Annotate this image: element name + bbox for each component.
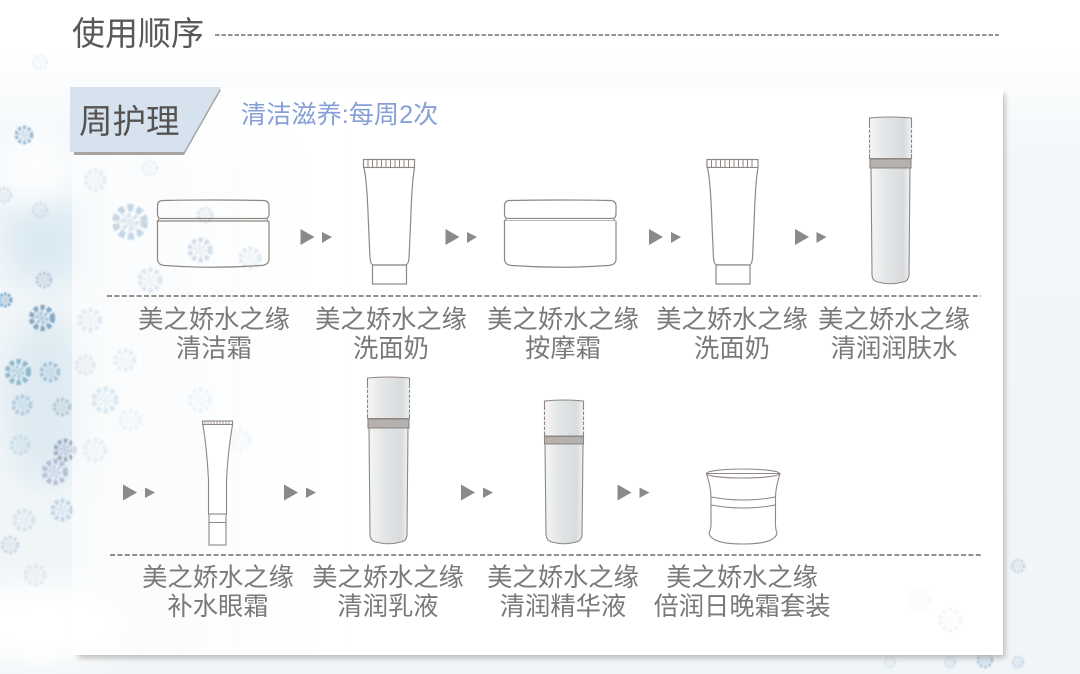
title: 使用顺序 xyxy=(72,15,204,52)
label: step 9: 美之娇水之缘 xyxy=(666,564,818,592)
panel shadow xyxy=(78,94,1005,658)
arrows xyxy=(123,229,826,500)
arrow 6 xyxy=(284,484,316,500)
label: step 8: 清润精华液 xyxy=(500,593,626,621)
label: step 5: 清润润肤水 xyxy=(831,335,957,363)
label: step 5: 美之娇水之缘 xyxy=(818,306,970,334)
icon: lotion bottle xyxy=(368,377,410,544)
panel crystals xyxy=(76,161,961,631)
label: step 9: 倍润日晚霜套装 xyxy=(653,593,831,621)
tag: weekly care xyxy=(70,87,221,155)
label: step 2: 洗面奶 xyxy=(353,335,429,363)
label: step 2 xyxy=(315,306,467,363)
label: step 7 xyxy=(312,564,464,621)
arrow 7 xyxy=(461,484,493,500)
label: step 1 xyxy=(138,306,290,363)
icon: essence bottle xyxy=(544,400,584,544)
icon: toner bottle xyxy=(870,117,912,284)
label: step 4 xyxy=(656,306,808,363)
arrow 2 xyxy=(446,229,477,245)
arrow 5 xyxy=(123,484,155,500)
icon: tube 1 xyxy=(364,160,414,284)
icon: tube 2 xyxy=(707,160,758,284)
label: step 5 xyxy=(818,306,970,363)
arrow 3 xyxy=(649,229,681,245)
icon: eye cream tube xyxy=(202,421,232,545)
arrow 4 xyxy=(795,229,826,245)
tag heading: 周护理 xyxy=(79,104,180,141)
label: step 6 xyxy=(142,564,294,621)
label: step 2: 美之娇水之缘 xyxy=(315,306,467,334)
label: step 3 xyxy=(487,306,639,363)
arrow 8 xyxy=(618,484,650,500)
label: step 8: 美之娇水之缘 xyxy=(487,564,639,592)
arrow 1 xyxy=(300,229,332,245)
icon: jar 2 xyxy=(504,200,616,267)
row 1 divider xyxy=(107,295,981,297)
label: step 9 xyxy=(653,564,831,621)
label: step 3: 美之娇水之缘 xyxy=(487,306,639,334)
label: step 3: 按摩霜 xyxy=(525,335,601,363)
label: step 4: 美之娇水之缘 xyxy=(656,306,808,334)
icon: day and night cream jar xyxy=(706,469,780,544)
label: step 8 xyxy=(487,564,639,621)
top dashed rule xyxy=(215,34,999,36)
label: step 6: 补水眼霜 xyxy=(167,593,269,621)
white panel xyxy=(72,89,1003,655)
row 2 divider xyxy=(110,554,981,556)
subtitle: 清洁滋养:每周2次 xyxy=(241,101,438,129)
label: step 1: 清洁霜 xyxy=(176,335,252,363)
label: step 7: 清润乳液 xyxy=(337,593,439,621)
label: step 1: 美之娇水之缘 xyxy=(138,306,290,334)
label: step 6: 美之娇水之缘 xyxy=(142,564,294,592)
icon: jar 1 xyxy=(158,200,269,267)
label: step 7: 美之娇水之缘 xyxy=(312,564,464,592)
label: step 4: 洗面奶 xyxy=(694,335,770,363)
